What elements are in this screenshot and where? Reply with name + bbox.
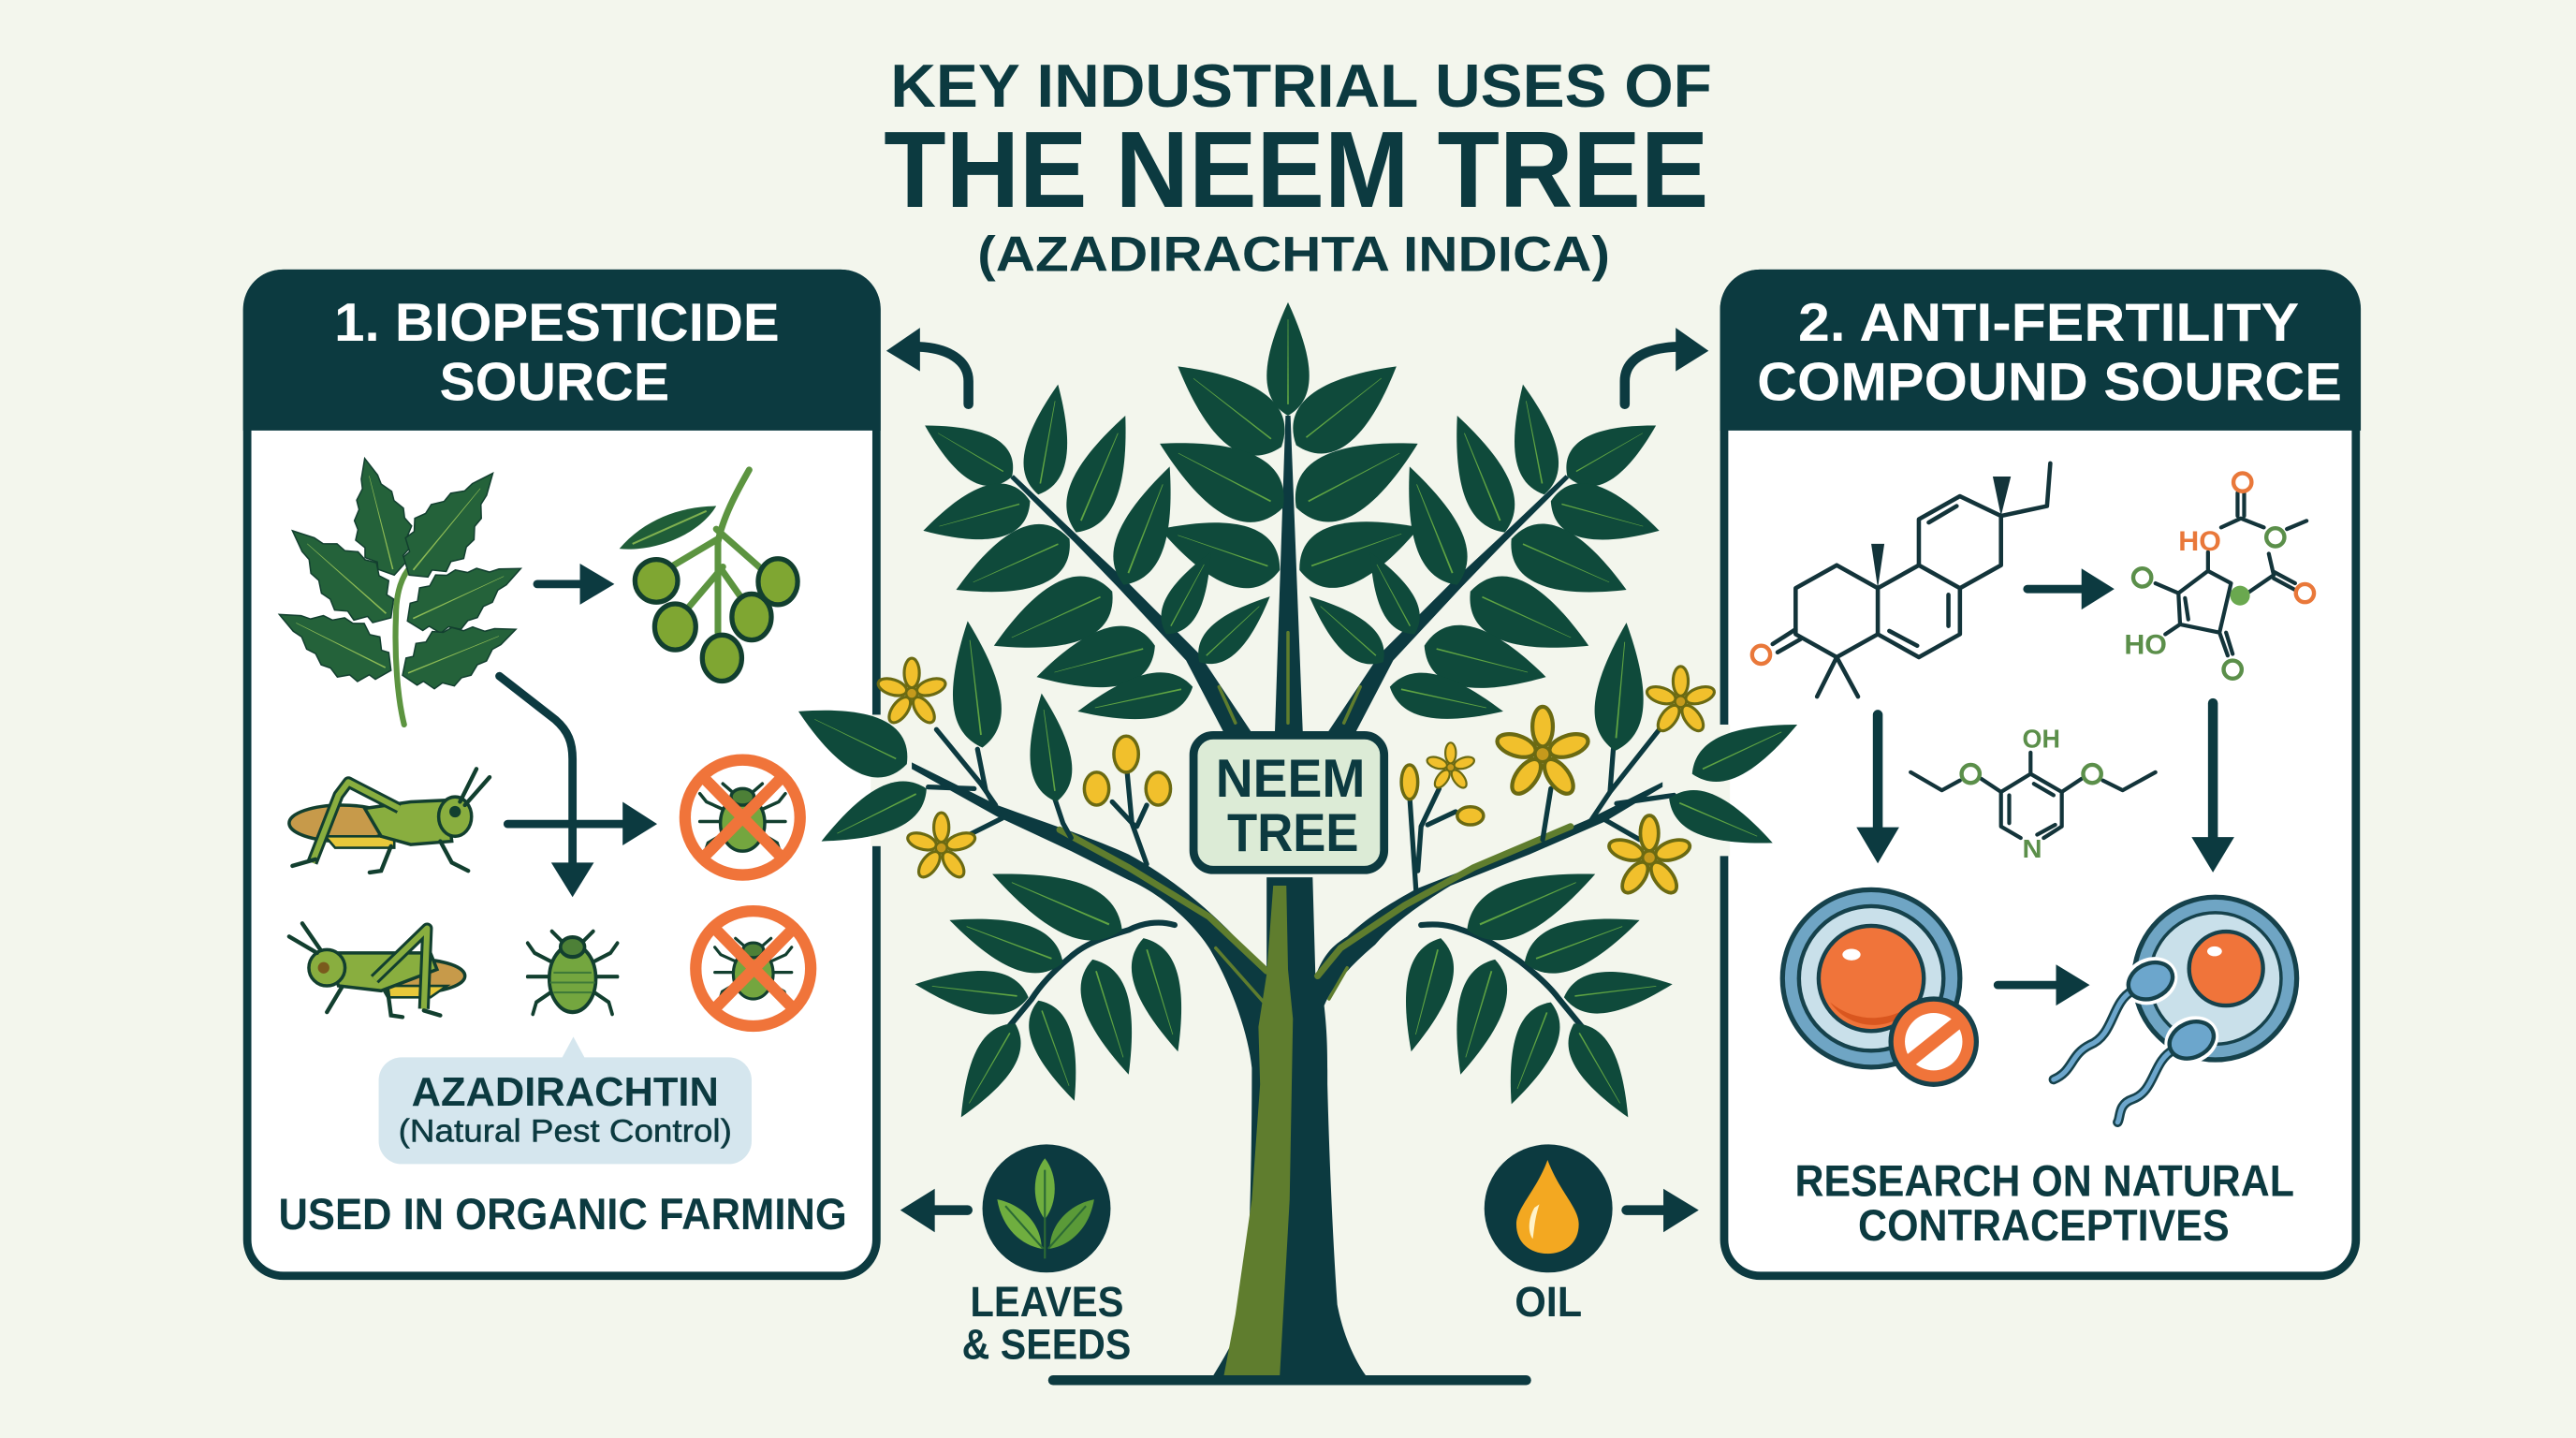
arrow: grasshopper to crossed bug xyxy=(507,801,657,845)
panel: biopesticide source: 1. BIOPESTICIDE xyxy=(334,293,780,353)
chart: pyridine molecule: N xyxy=(2023,834,2042,863)
text: research on natural contraceptives: CONTRACEPTIVES xyxy=(1858,1201,2230,1251)
callout: azadirachtin: (Natural Pest Control) xyxy=(399,1114,732,1150)
title xyxy=(884,51,1712,283)
arrow: bent down to aphid xyxy=(500,676,593,897)
sign: neem tree: NEEM xyxy=(1216,749,1365,809)
title: THE NEEM TREE xyxy=(884,109,1708,230)
arrow: tree to anti-fertility panel xyxy=(1625,328,1708,404)
chart: steroid molecule xyxy=(1752,463,2050,697)
panel: biopesticide source: SOURCE xyxy=(439,352,669,412)
icon: aphid xyxy=(528,932,618,1014)
upper branches xyxy=(1010,416,1569,733)
icon: grasshopper two xyxy=(289,923,465,1017)
arrow: tree to biopesticide panel xyxy=(886,328,969,404)
text: used in organic farming: USED IN ORGANIC FARMING xyxy=(278,1190,847,1240)
arrow: egg to fertilization xyxy=(1998,964,2089,1005)
chart: lactone molecule xyxy=(2124,473,2314,679)
side twigs xyxy=(929,729,1674,1027)
sign: neem tree: TREE xyxy=(1227,803,1358,863)
icon: grasshopper one xyxy=(289,769,490,873)
arrow: lactone down to egg xyxy=(2191,703,2234,873)
chart: pyridine molecule xyxy=(1910,725,2156,863)
sign: neem tree xyxy=(1193,735,1384,870)
arrow: leaf to fruit xyxy=(537,564,614,605)
icon: leaves and seeds badge xyxy=(983,1144,1110,1272)
callout: azadirachtin xyxy=(379,1036,752,1164)
text: research on natural contraceptives xyxy=(1794,1157,2294,1251)
label: leaves and seeds: & SEEDS xyxy=(962,1320,1131,1368)
title: KEY INDUSTRIAL USES OF xyxy=(890,51,1712,120)
panel: anti-fertility compound source xyxy=(1717,270,2361,1276)
illustration: neem tree xyxy=(785,302,1807,1380)
upper branch highlights xyxy=(1219,633,1360,723)
icon: oil drop badge xyxy=(1485,1144,1613,1272)
icon: neem fruit branch xyxy=(620,470,798,681)
panel: biopesticide source xyxy=(243,270,884,1276)
panel: anti-fertility compound source: 2. ANTI-FERTILITY xyxy=(1798,293,2299,353)
label: leaves and seeds xyxy=(962,1278,1131,1368)
icon: crossed bug two xyxy=(695,911,811,1026)
icon: egg and sperm cells xyxy=(2054,897,2297,1123)
arrow: molecule to lactone xyxy=(2027,568,2115,609)
callout: azadirachtin: AZADIRACHTIN xyxy=(412,1069,719,1115)
chart: lactone molecule: HO xyxy=(2124,630,2167,661)
leaves xyxy=(785,302,1807,1127)
trunk with main boughs xyxy=(912,762,1662,1380)
icon: crossed bug one xyxy=(685,760,800,875)
title: (AZADIRACHTA INDICA) xyxy=(977,227,1610,283)
bough highlights xyxy=(1060,827,1571,1005)
label: leaves and seeds: LEAVES xyxy=(970,1278,1123,1326)
panel: anti-fertility compound source: COMPOUND SOURCE xyxy=(1757,352,2342,412)
label: oil: OIL xyxy=(1515,1278,1582,1326)
arrow: molecule down to egg xyxy=(1856,714,1899,863)
icon: blocked egg cell xyxy=(1782,889,1976,1084)
arrow: oil badge to panel xyxy=(1627,1189,1699,1232)
arrow: leaves badge to panel xyxy=(900,1189,968,1232)
text: research on natural contraceptives: RESEARCH ON NATURAL xyxy=(1794,1157,2294,1207)
flowers and buds xyxy=(876,658,1717,897)
chart: lactone molecule: HO xyxy=(2178,526,2221,557)
icon: neem compound leaf xyxy=(266,451,534,725)
chart: pyridine molecule: OH xyxy=(2023,725,2060,754)
